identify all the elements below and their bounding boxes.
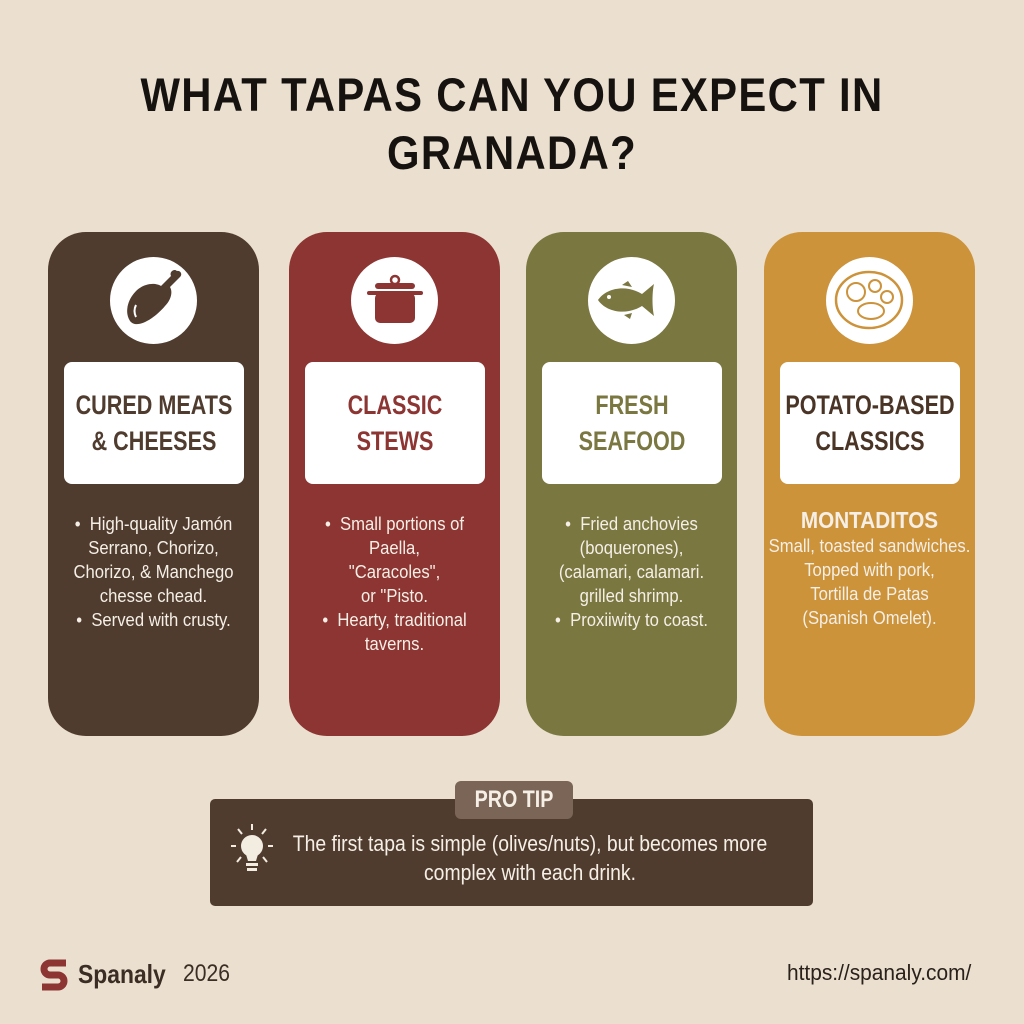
- tip text: [293, 831, 767, 885]
- footer logo: 2026: [183, 960, 230, 987]
- label: POTATO-BASED: [785, 390, 955, 420]
- panel: stews: [289, 232, 500, 736]
- text: [73, 513, 234, 630]
- text: Serrano, Chorizo,: [88, 537, 219, 558]
- label: & CHEESES: [92, 426, 216, 456]
- title: WHAT TAPAS CAN YOU EXPECT IN: [140, 68, 884, 121]
- text: grilled shrimp.: [580, 585, 683, 606]
- text: [769, 507, 970, 628]
- label: [305, 362, 485, 484]
- text: [322, 513, 467, 654]
- label: CURED MEATS: [76, 390, 232, 420]
- text: • Fried anchovies: [565, 513, 698, 534]
- footer url: https://spanaly.com/: [787, 960, 971, 985]
- tip text: The first tapa is simple (olives/nuts), but becomes more: [293, 831, 767, 856]
- icon: light bulb: [231, 824, 273, 871]
- text: • Served with crusty.: [76, 609, 231, 630]
- label: SEAFOOD: [579, 426, 685, 456]
- text: (Spanish Omelet).: [802, 607, 937, 628]
- title: [140, 68, 884, 179]
- label: FRESH: [595, 390, 669, 420]
- icon: ham leg: [110, 257, 197, 344]
- text: Paella,: [369, 537, 420, 558]
- text: or "Pisto.: [361, 585, 428, 606]
- text: taverns.: [365, 633, 424, 654]
- panel: seafood: [526, 232, 737, 736]
- footer logo: [40, 959, 230, 990]
- text: (boquerones),: [580, 537, 683, 558]
- text: • Hearty, traditional: [322, 609, 467, 630]
- icon: pot: [351, 257, 438, 344]
- text: Chorizo, & Manchego: [73, 561, 234, 582]
- text: • High-quality Jamón: [75, 513, 232, 534]
- panel: cured meats: [48, 232, 259, 736]
- icon: plate: [826, 257, 913, 344]
- label: CLASSIC: [348, 390, 442, 420]
- text: Small, toasted sandwiches.: [769, 535, 970, 556]
- label: CLASSICS: [815, 426, 925, 456]
- text: Topped with pork,: [804, 559, 935, 580]
- pro tip tab: PRO TIP: [475, 786, 553, 813]
- icon: fish: [588, 257, 675, 344]
- text: Tortilla de Patas: [810, 583, 929, 604]
- text: MONTADITOS: [801, 507, 938, 533]
- text: • Proxiiwity to coast.: [555, 609, 708, 630]
- text: [555, 513, 708, 630]
- label: [542, 362, 722, 484]
- title: GRANADA?: [387, 126, 637, 179]
- label: [780, 362, 960, 484]
- panel: potato: [764, 232, 975, 736]
- text: chesse chead.: [100, 585, 207, 606]
- pro tip tab: [455, 781, 573, 819]
- text: "Caracoles",: [349, 561, 440, 582]
- label: [64, 362, 244, 484]
- panel: pro tip: [210, 799, 813, 906]
- text: (calamari, calamari.: [559, 561, 704, 582]
- tip text: complex with each drink.: [424, 860, 636, 885]
- footer logo: Spanaly: [78, 959, 166, 989]
- label: STEWS: [357, 426, 433, 456]
- text: • Small portions of: [325, 513, 464, 534]
